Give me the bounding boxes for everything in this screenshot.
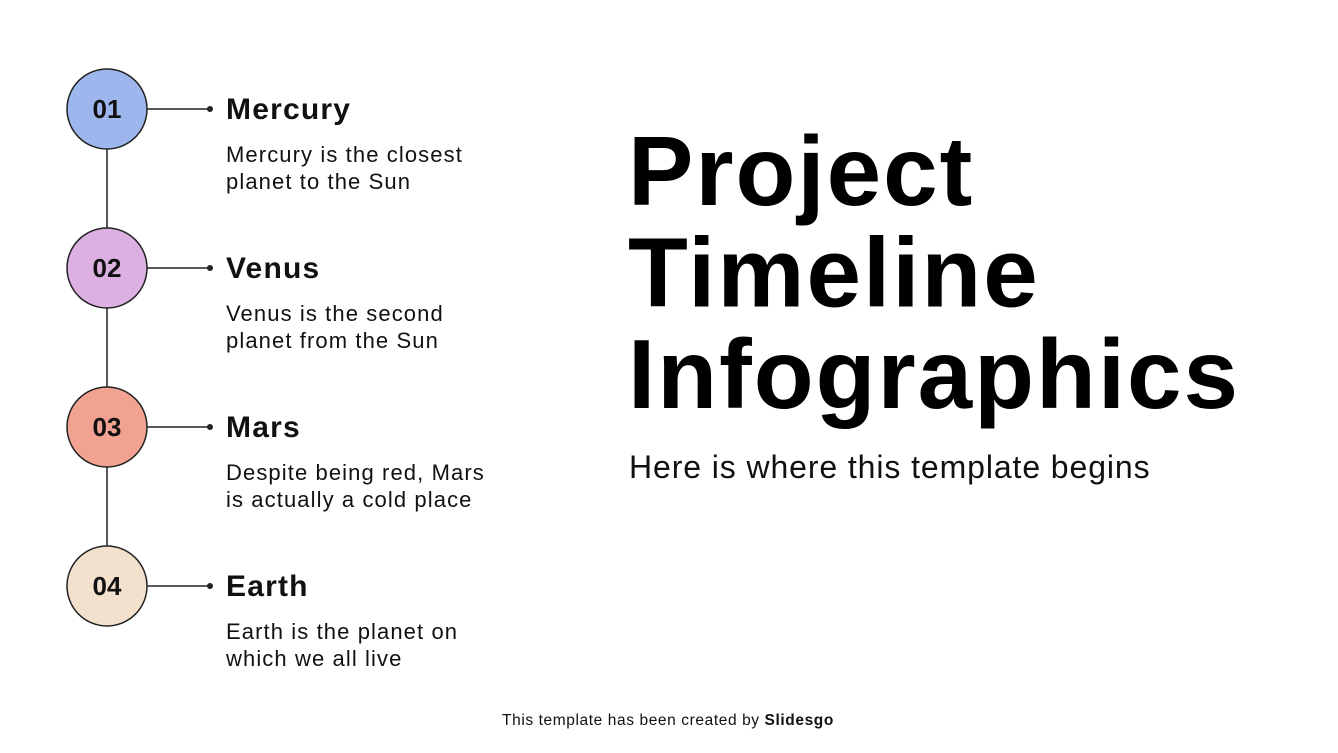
text: Mars description: is actually a cold place bbox=[226, 487, 473, 512]
heading: Mercury: Mercury bbox=[226, 93, 351, 126]
connector arrow 01 bbox=[147, 106, 213, 112]
heading: Venus: Venus bbox=[226, 252, 320, 285]
title: Timeline bbox=[628, 218, 1040, 328]
icon: circle 04: 04 bbox=[93, 571, 122, 601]
text: Mercury description: planet to the Sun bbox=[226, 169, 411, 194]
icon: circle 01: 01 bbox=[93, 94, 121, 124]
text: Venus description: planet from the Sun bbox=[226, 328, 439, 353]
text: Mercury description: Mercury is the closest bbox=[226, 142, 463, 167]
icon: circle 02 bbox=[67, 228, 147, 308]
connector arrow 02 bbox=[147, 265, 213, 271]
subtitle: Here is where this template begins bbox=[629, 449, 1151, 485]
icon: circle 03 bbox=[67, 387, 147, 467]
text: Venus description: Venus is the second bbox=[226, 301, 444, 326]
icon: circle 02: 02 bbox=[93, 253, 121, 283]
heading: Earth: Earth bbox=[226, 570, 309, 603]
icon: circle 03: 03 bbox=[93, 412, 121, 442]
timeline item 03: Mars bbox=[67, 387, 485, 512]
text: Earth description: which we all live bbox=[225, 646, 402, 671]
footer credit: This template has been created by Slidesgo bbox=[502, 712, 834, 729]
title: Infographics bbox=[628, 319, 1240, 429]
connector arrow 03 bbox=[147, 424, 213, 430]
icon: circle 01 bbox=[67, 69, 147, 149]
title: Project bbox=[628, 116, 974, 226]
heading: Mars: Mars bbox=[226, 411, 301, 444]
text: Mars description: Despite being red, Mars bbox=[226, 460, 485, 485]
icon: circle 04 bbox=[67, 546, 147, 626]
timeline item 04: Earth bbox=[67, 546, 458, 671]
timeline item 02: Venus bbox=[67, 228, 444, 353]
text: Earth description: Earth is the planet on bbox=[226, 619, 458, 644]
timeline item 01: Mercury bbox=[67, 69, 463, 194]
connector arrow 04 bbox=[147, 583, 213, 589]
